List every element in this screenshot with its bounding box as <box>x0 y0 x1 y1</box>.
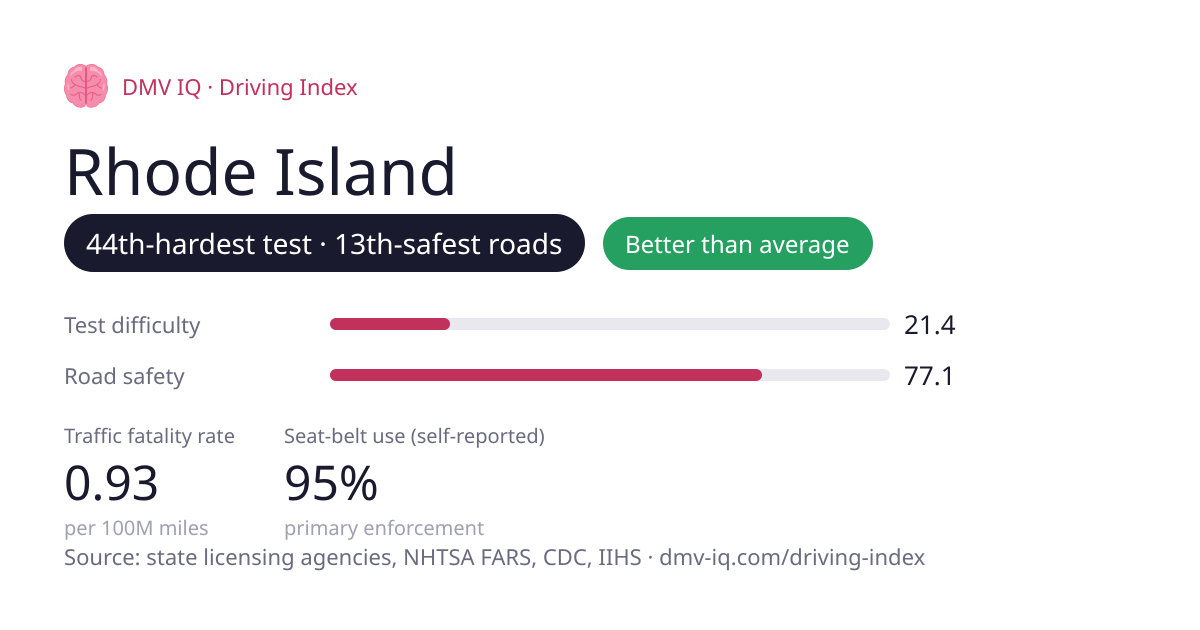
label: Road safety <box>64 361 185 391</box>
stat: traffic fatality rate <box>64 422 235 541</box>
bar <box>330 318 890 330</box>
rank pill: 44th-hardest test · 13th-safest roads <box>86 225 562 263</box>
stat label: Seat-belt use (self-reported) <box>284 422 545 449</box>
stat value: 0.93 <box>64 450 159 515</box>
bar <box>330 369 890 381</box>
stat note: primary enforcement <box>284 514 484 541</box>
label: Test difficulty <box>64 310 200 340</box>
stat: seat-belt use <box>284 422 545 541</box>
value: 21.4 <box>904 306 956 342</box>
metric row: road safety <box>64 357 956 393</box>
source line: Source: state licensing agencies, NHTSA FARS, CDC, IIHS · dmv-iq.com/driving-index <box>64 542 925 572</box>
title: Rhode Island <box>64 127 458 214</box>
stat value: 95% <box>284 450 379 515</box>
verdict pill: Better than average <box>625 228 850 261</box>
stat note: per 100M miles <box>64 514 209 541</box>
verdict pill <box>603 217 873 270</box>
value: 77.1 <box>904 357 956 393</box>
metric row: test difficulty <box>64 306 956 342</box>
icon: brain <box>64 64 108 108</box>
stat label: Traffic fatality rate <box>64 422 235 449</box>
brand label: DMV IQ · Driving Index <box>122 72 358 102</box>
rank pill <box>64 214 585 272</box>
